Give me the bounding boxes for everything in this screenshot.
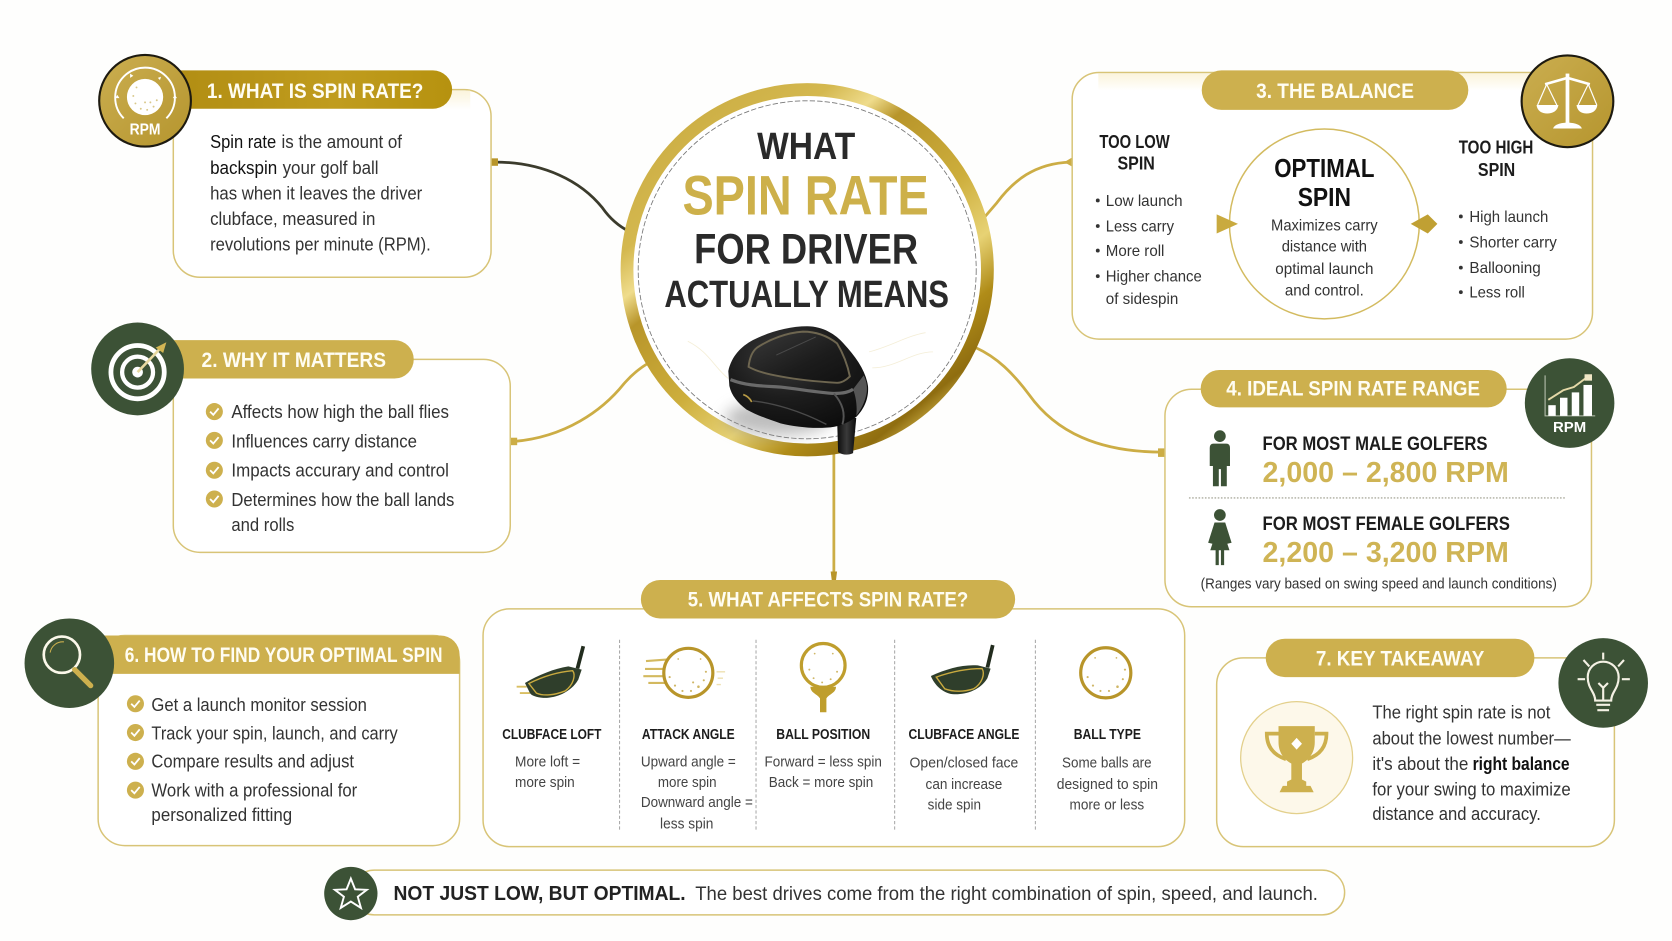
takeaway text: right balance <box>1473 754 1570 774</box>
icon: female golfer <box>1208 509 1232 565</box>
checklist 2: and rolls <box>231 515 294 535</box>
heading pill 2 <box>165 340 414 379</box>
factor: clubface angle: CLUBFACE ANGLE <box>909 727 1020 743</box>
takeaway text: The right spin rate is not <box>1372 703 1550 723</box>
footer banner <box>324 867 1345 920</box>
checklist 6: Work with a professional for <box>151 781 357 801</box>
body text 1: clubface, measured in <box>210 209 375 229</box>
factor: clubface loft: CLUBFACE LOFT <box>502 727 602 743</box>
factor: clubface angle: Open/closed face <box>910 756 1018 772</box>
factor: clubface angle: side spin <box>928 797 981 813</box>
factor: attack angle <box>641 648 753 833</box>
arrow: high to optimal <box>1411 214 1437 234</box>
too high spin column: Ballooning <box>1469 260 1541 277</box>
factor: ball position: BALL POSITION <box>776 727 870 743</box>
too high spin column <box>1459 138 1557 301</box>
optimal spin circle: and control. <box>1285 282 1364 299</box>
body text 1 <box>210 132 431 255</box>
factor: ball type: Some balls are <box>1062 756 1152 772</box>
heading text 4: 4. IDEAL SPIN RATE RANGE <box>1226 377 1480 401</box>
checklist 2: Determines how the ball lands <box>231 490 454 510</box>
optimal spin circle <box>1229 129 1419 319</box>
icon: magnifier <box>25 618 114 708</box>
icon: scales <box>1522 55 1613 147</box>
body text 1: Spin rate <box>210 132 276 152</box>
panel 5: what affects spin rate <box>483 580 1185 847</box>
male range text <box>1263 434 1509 489</box>
heading text 7: 7. KEY TAKEAWAY <box>1316 646 1484 670</box>
panel 6: how to find your optimal spin <box>25 618 460 846</box>
body text 1: revolutions per minute (RPM). <box>210 235 431 255</box>
icon: star <box>324 867 377 920</box>
female range text: FOR MOST FEMALE GOLFERS <box>1263 514 1510 535</box>
factor: attack angle: less spin <box>660 817 713 833</box>
note: (Ranges vary based on swing speed and launch conditions) <box>1201 577 1557 593</box>
heading text 5: 5. WHAT AFFECTS SPIN RATE? <box>688 588 968 612</box>
male range text: 2,000 – 2,800 RPM <box>1263 457 1509 489</box>
factor: ball type: designed to spin <box>1057 777 1158 793</box>
title: for driver: FOR DRIVER <box>694 225 918 273</box>
body text 1: has when it leaves the driver <box>210 183 422 203</box>
panel 4: ideal spin rate range <box>1165 358 1614 607</box>
takeaway text: it's about the <box>1372 754 1468 774</box>
factor: ball position <box>765 644 882 791</box>
icon: chart <box>1525 358 1614 448</box>
icon: target <box>91 323 184 415</box>
factor: ball type: BALL TYPE <box>1074 727 1141 743</box>
factor: clubface loft: More loft = <box>515 755 580 771</box>
too low spin column: Less carry <box>1106 218 1174 235</box>
too low spin column: TOO LOW <box>1099 132 1170 152</box>
too low spin column: SPIN <box>1118 154 1155 174</box>
icon: male golfer <box>1210 430 1230 486</box>
checklist 2: Affects how high the ball flies <box>231 402 449 422</box>
factor: attack angle: ATTACK ANGLE <box>642 727 735 743</box>
heading pill 7 <box>1266 639 1534 677</box>
too low spin column <box>1096 132 1202 308</box>
optimal spin circle: OPTIMAL <box>1274 155 1374 183</box>
too high spin column: High launch <box>1469 209 1548 226</box>
checklist 2 <box>206 402 454 535</box>
factor: clubface loft: more spin <box>515 775 575 791</box>
panel 7: key takeaway <box>1217 638 1648 847</box>
icon: driver head <box>688 326 933 455</box>
heading text 3: 3. THE BALANCE <box>1256 79 1414 103</box>
checklist 6: Compare results and adjust <box>151 752 354 772</box>
too high spin column: SPIN <box>1478 160 1515 180</box>
checklist 6 <box>127 695 399 825</box>
panel 1: what is spin rate <box>99 55 491 277</box>
icon: light bulb <box>1558 638 1648 728</box>
too low spin column: More roll <box>1106 243 1164 260</box>
footer bold text: NOT JUST LOW, BUT OPTIMAL. <box>393 883 686 905</box>
checklist 2: Impacts accurary and control <box>231 461 449 481</box>
takeaway text: distance and accuracy. <box>1372 804 1541 824</box>
connector: panel 3 to centre <box>984 162 1071 218</box>
checklist 2: Influences carry distance <box>231 431 417 451</box>
heading bar 6 <box>91 636 460 674</box>
central title circle <box>627 90 987 455</box>
icon: RPM ball: RPM <box>130 121 161 138</box>
male range text: FOR MOST MALE GOLFERS <box>1263 434 1488 455</box>
too high spin column: Shorter carry <box>1469 234 1557 251</box>
connector: panel 2 to centre <box>514 363 649 441</box>
connector nodes <box>491 158 1165 580</box>
connector: panel 1 to centre <box>495 162 629 231</box>
connector: panel 4 to centre <box>976 348 1162 452</box>
factor: clubface angle: can increase <box>926 777 1002 793</box>
takeaway text: about the lowest number— <box>1372 728 1571 748</box>
factor: attack angle: Upward angle = <box>641 755 736 771</box>
factor: ball position: Back = more spin <box>769 775 873 791</box>
factor: clubface loft <box>502 646 602 791</box>
connector: centre to panel 5 <box>833 453 835 578</box>
body text 1: is the amount of <box>282 132 403 152</box>
title: what: WHAT <box>757 125 856 168</box>
too low spin column: of sidespin <box>1106 291 1178 308</box>
heading pill 3 <box>1202 70 1468 110</box>
title: actually means: ACTUALLY MEANS <box>664 273 949 316</box>
heading pill 5 <box>641 580 1015 618</box>
optimal spin circle: distance with <box>1282 239 1367 256</box>
female range text: 2,200 – 3,200 RPM <box>1263 537 1509 569</box>
body text 1: backspin <box>210 158 277 178</box>
heading text 6: 6. HOW TO FIND YOUR OPTIMAL SPIN <box>125 643 443 667</box>
optimal spin circle: optimal launch <box>1275 261 1373 278</box>
heading pill 1 <box>160 70 452 109</box>
optimal spin circle: SPIN <box>1298 184 1351 212</box>
heading pill 4 <box>1201 370 1507 407</box>
factor: ball type: more or less <box>1070 797 1144 813</box>
factor: attack angle: more spin <box>658 775 717 791</box>
panel 2: why it matters <box>91 323 510 552</box>
too high spin column: TOO HIGH <box>1459 138 1533 158</box>
too low spin column: Higher chance <box>1106 269 1202 286</box>
too low spin column: Low launch <box>1106 193 1183 210</box>
checklist 6: personalized fitting <box>151 805 292 825</box>
factor: ball type <box>1057 648 1158 813</box>
factor: clubface angle <box>909 645 1020 813</box>
body text 1: your golf ball <box>283 158 379 178</box>
arrow: low to optimal <box>1217 214 1238 234</box>
checklist 6: Get a launch monitor session <box>151 695 367 715</box>
icon: RPM ball <box>99 55 191 147</box>
factor: ball position: Forward = less spin <box>765 755 882 771</box>
panel 3: the balance <box>1072 55 1613 339</box>
takeaway text <box>1372 703 1571 824</box>
female range text <box>1263 514 1510 569</box>
icon: chart: RPM <box>1553 419 1586 436</box>
optimal spin circle: Maximizes carry <box>1271 217 1378 234</box>
heading text 2: 2. WHY IT MATTERS <box>202 348 386 372</box>
checklist 6: Track your spin, launch, and carry <box>151 723 399 743</box>
factor: attack angle: Downward angle = <box>641 795 753 811</box>
heading text 1: 1. WHAT IS SPIN RATE? <box>207 79 423 103</box>
takeaway text: for your swing to maximize <box>1372 779 1571 799</box>
too high spin column: Less roll <box>1469 284 1525 301</box>
footer text: The best drives come from the right combination of spin, speed, and launch. <box>695 883 1318 905</box>
title: spin rate: SPIN RATE <box>682 164 929 226</box>
icon: trophy <box>1241 702 1353 814</box>
